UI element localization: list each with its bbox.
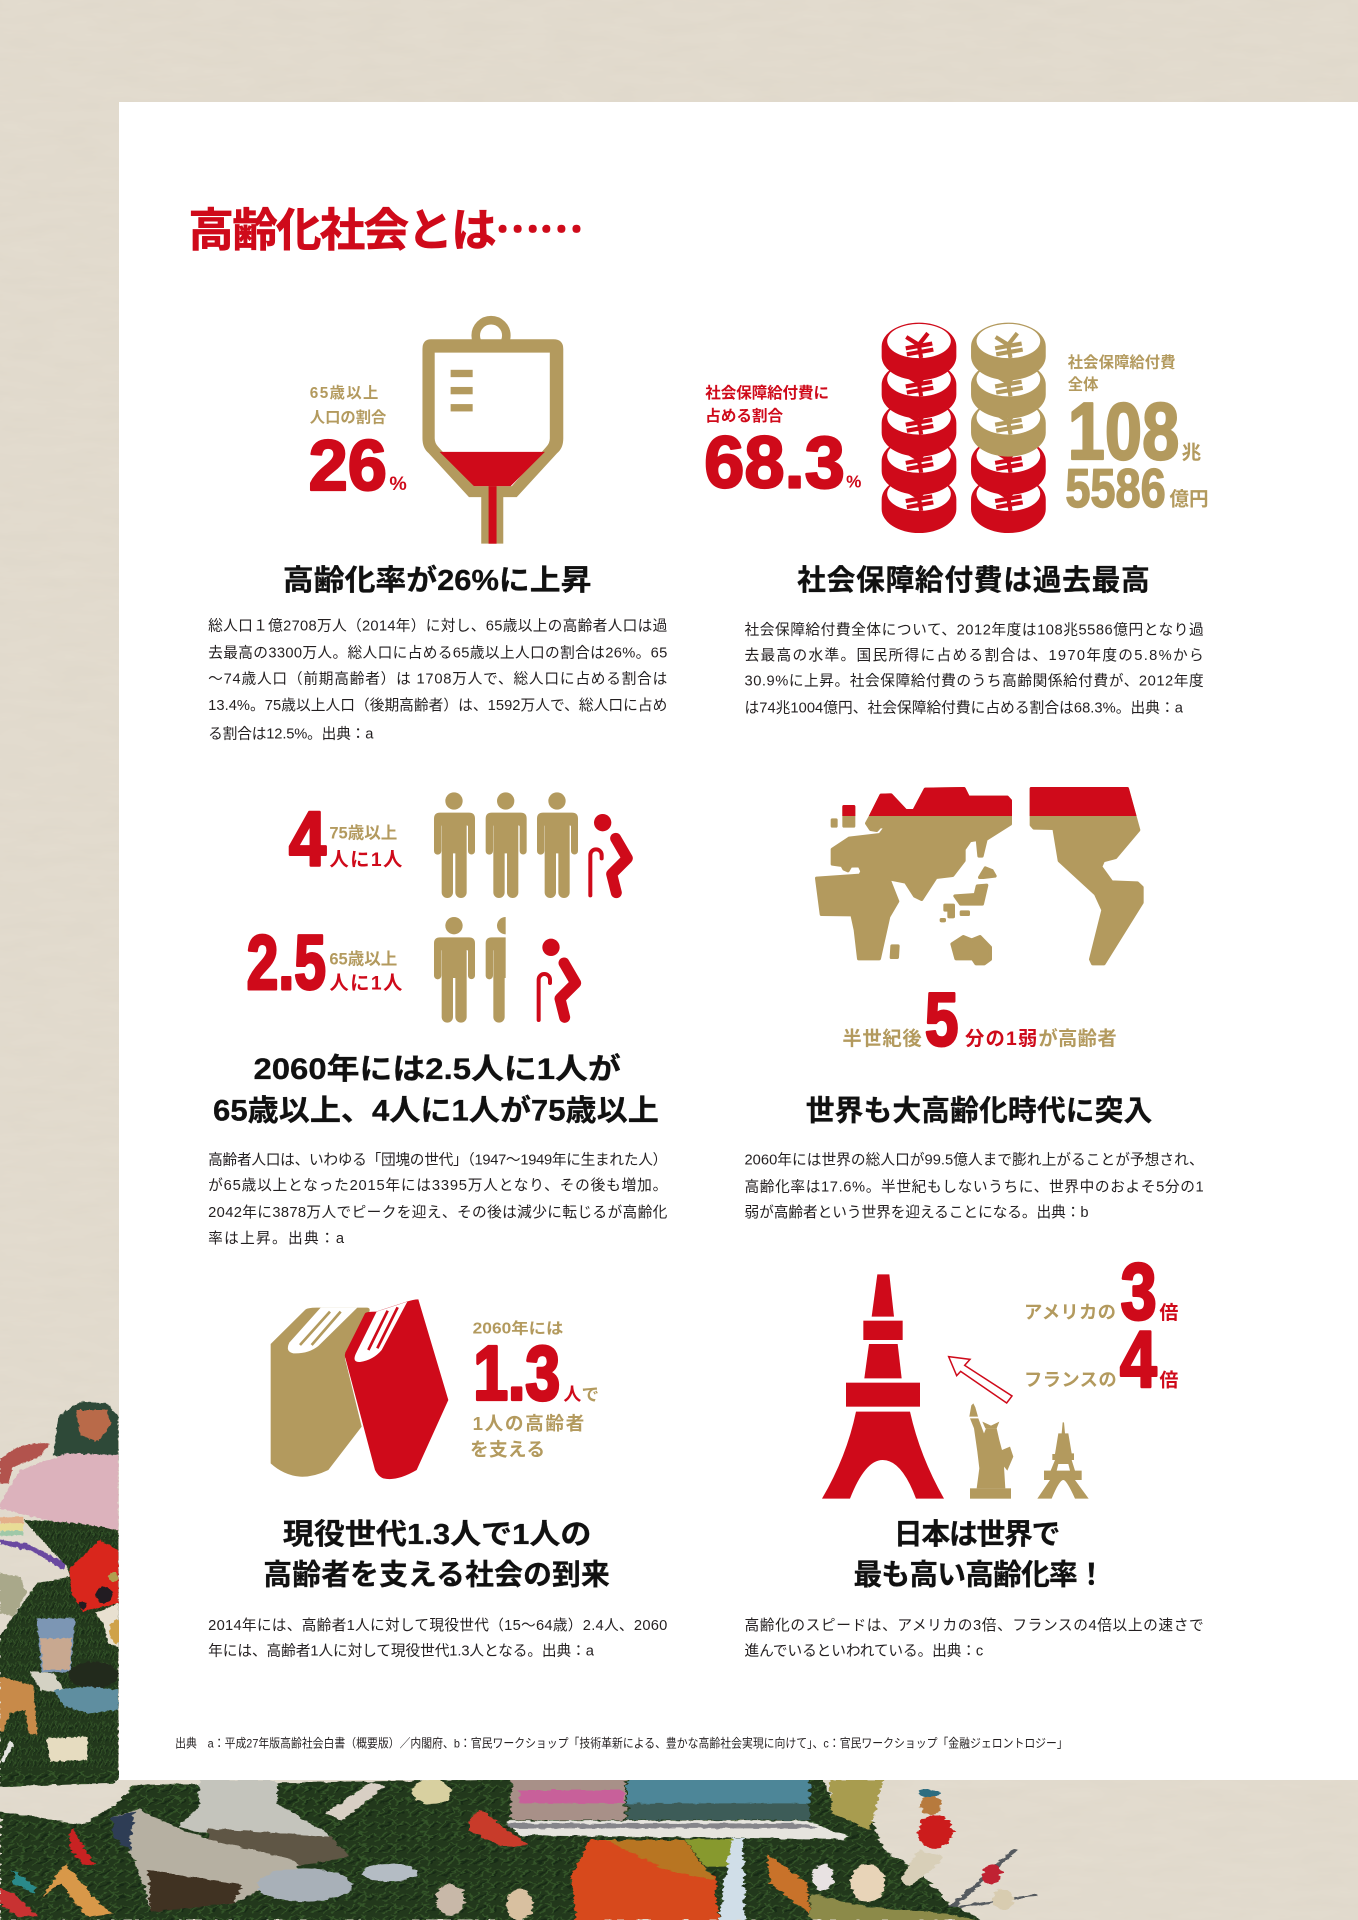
icon: Eiffel Tower — [1037, 1422, 1089, 1499]
heading: 2060 ratios: 2060年には2.5人に1人が — [253, 1052, 621, 1086]
title: 高齢化社会とは…… — [189, 194, 584, 260]
text block: social security: 30.9%に上昇。社会保障給付費のうち高齢関係給付費が、2012年度 — [745, 673, 1204, 690]
heading: highest in world — [853, 1519, 1106, 1592]
icon: row of 4 people — [434, 792, 627, 898]
heading: world aging: 世界も大高齢化時代に突入 — [806, 1095, 1152, 1127]
stat: 65+ population share: % — [389, 473, 407, 495]
text block: social security: 去最高の水準。国民所得に占める割合は、1970年度の5.8%から — [745, 647, 1204, 664]
text block: workforce support: 2014年には、高齢者1人に対して現役世代（15〜64歳）2.4人、2060 — [208, 1617, 667, 1634]
icon: outline arrow — [949, 1357, 1012, 1403]
heading: 2060 ratios: 65歳以上、4人に1人が75歳以上 — [213, 1093, 659, 1127]
collage: left side decoration — [0, 1402, 124, 1780]
stat: elderly share of social security: 社会保障給付費に — [705, 384, 829, 402]
text block: aging rate: 総人口１億2708万人（2014年）に対し、65歳以上の高齢者人口は過 — [208, 618, 668, 635]
icon: stacks of yen coins — [882, 323, 1046, 533]
text block: highest in world: 進んでいるといわれている。出典：c — [745, 1643, 983, 1660]
stat: 4 people: 人に1人 — [329, 850, 403, 871]
stat: 2.5 people: 人に1人 — [329, 973, 403, 994]
text block: 2060 ratios: 率は上昇。出典：a — [208, 1230, 345, 1247]
text block: 2060 ratios — [208, 1152, 668, 1247]
stat: speed vs France: 4 — [1120, 1314, 1157, 1403]
stat: 1.3 workers — [470, 1319, 599, 1460]
stat: speed vs France: フランスの — [1024, 1369, 1117, 1390]
stat: speed vs France: 倍 — [1159, 1370, 1178, 1392]
text block: 2060 ratios: 高齢者人口は、いわゆる「団塊の世代」（1947〜1949年に生まれた人） — [208, 1152, 667, 1169]
stat: elderly share of social security — [704, 384, 861, 503]
stat: 1.3 workers: 1人の高齢者 — [473, 1413, 584, 1434]
icon: red book — [345, 1299, 448, 1479]
stat: 1.3 workers: を支える — [470, 1439, 545, 1460]
text block: workforce support — [208, 1617, 667, 1660]
stat: elderly share of social security: 68.3 — [704, 420, 845, 503]
stat: 65+ population share — [309, 385, 407, 506]
panel: white content sheet — [119, 102, 1358, 1780]
stat: 4 people — [289, 797, 403, 883]
text block: aging rate: 〜74歳人口（前期高齢者）は 1708万人で、総人口に占める割合は — [208, 670, 667, 687]
heading: aging rate: 高齢化率が26%に上昇 — [283, 564, 591, 597]
text block: world aging: 2060年には世界の総人口が99.5億人まで膨れ上がることが予想され、 — [745, 1152, 1204, 1169]
collage: bottom strip decoration — [0, 1770, 1037, 1920]
text block: highest in world: 高齢化のスピードは、アメリカの3倍、フランスの4倍以上の速さで — [745, 1617, 1204, 1634]
text block: 2060 ratios: 2042年に3878万人でピークを迎え、その後は減少に転じるが高齢化 — [208, 1204, 668, 1221]
stat: one fifth elderly: 分の1弱 — [965, 1028, 1037, 1050]
stat: social security total: 億円 — [1169, 489, 1209, 511]
stat: social security total: 全体 — [1068, 375, 1099, 393]
footer: sources: 出典 a：平成27年版高齢社会白書（概要版）／内閣府、b：官民ワークショップ「技術革新による、豊かな高齢社会実現に向けて」、c：官民ワークショップ「金融ジェロントロジー」 — [175, 1735, 1068, 1750]
text block: social security: は74兆1004億円、社会保障給付費に占める割合は68.3%。出典：a — [745, 700, 1184, 717]
stat: 65+ population share: 人口の割合 — [310, 409, 387, 426]
stat: speed vs USA — [1024, 1247, 1178, 1336]
chart: leaning books — [271, 1299, 599, 1479]
stat: 1.3 workers: 人 — [563, 1385, 581, 1405]
stat: social security total: 兆 — [1182, 442, 1201, 464]
stat: 4 people: 4 — [289, 797, 326, 883]
stat: speed vs USA: 3 — [1121, 1247, 1157, 1336]
icon: Tokyo Tower — [822, 1274, 944, 1499]
stat: elderly share of social security: % — [846, 471, 861, 491]
stat: elderly share of social security: 占める割合 — [705, 407, 784, 425]
stat: social security total — [1065, 353, 1209, 519]
text block: highest in world — [745, 1617, 1204, 1660]
heading: social security: 社会保障給付費は過去最高 — [797, 565, 1150, 597]
stat: speed vs France — [1024, 1314, 1178, 1403]
stat: 65+ population share: 65歳以上 — [310, 385, 378, 402]
text block: workforce support: 年には、高齢者1人に対して現役世代1.3人となる。出典：a — [208, 1643, 595, 1660]
text block: aging rate: る割合は12.5%。出典：a — [208, 725, 374, 742]
icon: gold book — [271, 1308, 370, 1477]
text block: social security: 社会保障給付費全体について、2012年度は108兆5586億円となり過 — [745, 621, 1204, 638]
chart: people pictograms — [247, 792, 627, 1023]
stat: one fifth elderly: 5 — [925, 978, 958, 1062]
chart: world map — [817, 789, 1142, 1062]
stat: 1.3 workers: 1.3 — [473, 1332, 560, 1417]
text block: aging rate: 13.4%。75歳以上人口（後期高齢者）は、1592万人で、総人口に占め — [208, 697, 667, 714]
text block: aging rate: 去最高の3300万人。総人口に占める65歳以上人口の割合は26%。65 — [208, 645, 667, 662]
heading: workforce support: 現役世代1.3人で1人の — [283, 1519, 591, 1551]
stat: one fifth elderly — [842, 978, 1117, 1062]
heading: highest in world: 日本は世界で — [894, 1519, 1060, 1551]
text block: 2060 ratios: が65歳以上となった2015年には3395万人となり、その後も増加。 — [208, 1177, 667, 1194]
heading: workforce support — [263, 1519, 610, 1592]
text block: aging rate — [208, 618, 668, 742]
text block: social security — [745, 621, 1204, 717]
text block: world aging — [745, 1152, 1204, 1221]
text block: world aging: 高齢化率は17.6%。半世紀もしないうちに、世界中のおよそ5分の1 — [745, 1178, 1204, 1195]
heading: workforce support: 高齢者を支える社会の到来 — [263, 1560, 610, 1592]
stat: speed vs USA: アメリカの — [1024, 1301, 1116, 1322]
stat: one fifth elderly: 半世紀後 — [842, 1028, 922, 1050]
icon: IV drip bag — [422, 320, 563, 544]
stat: 1.3 workers: で — [582, 1385, 599, 1405]
stat: speed vs USA: 倍 — [1159, 1302, 1178, 1324]
stat: social security total: 社会保障給付費 — [1068, 353, 1176, 371]
stat: 1.3 workers: 2060年には — [473, 1319, 563, 1337]
heading: 2060 ratios — [213, 1052, 659, 1127]
stat: 2.5 people — [247, 920, 403, 1006]
chart: towers comparison — [822, 1247, 1178, 1499]
stat: 4 people: 75歳以上 — [329, 823, 397, 842]
stat: 2.5 people: 2.5 — [247, 920, 326, 1006]
stat: social security total: 108 — [1068, 387, 1179, 477]
icon: Statue of Liberty — [969, 1403, 1013, 1499]
heading: highest in world: 最も高い高齢化率！ — [853, 1560, 1106, 1592]
text block: world aging: 弱が高齢者という世界を迎えることになる。出典：b — [745, 1204, 1089, 1221]
stat: 65+ population share: 26 — [309, 427, 387, 506]
icon: row of 2.5 people — [434, 917, 576, 1023]
stat: one fifth elderly: が高齢者 — [1038, 1027, 1117, 1050]
stat: social security total: 5586 — [1065, 457, 1166, 519]
stat: 2.5 people: 65歳以上 — [329, 949, 397, 968]
